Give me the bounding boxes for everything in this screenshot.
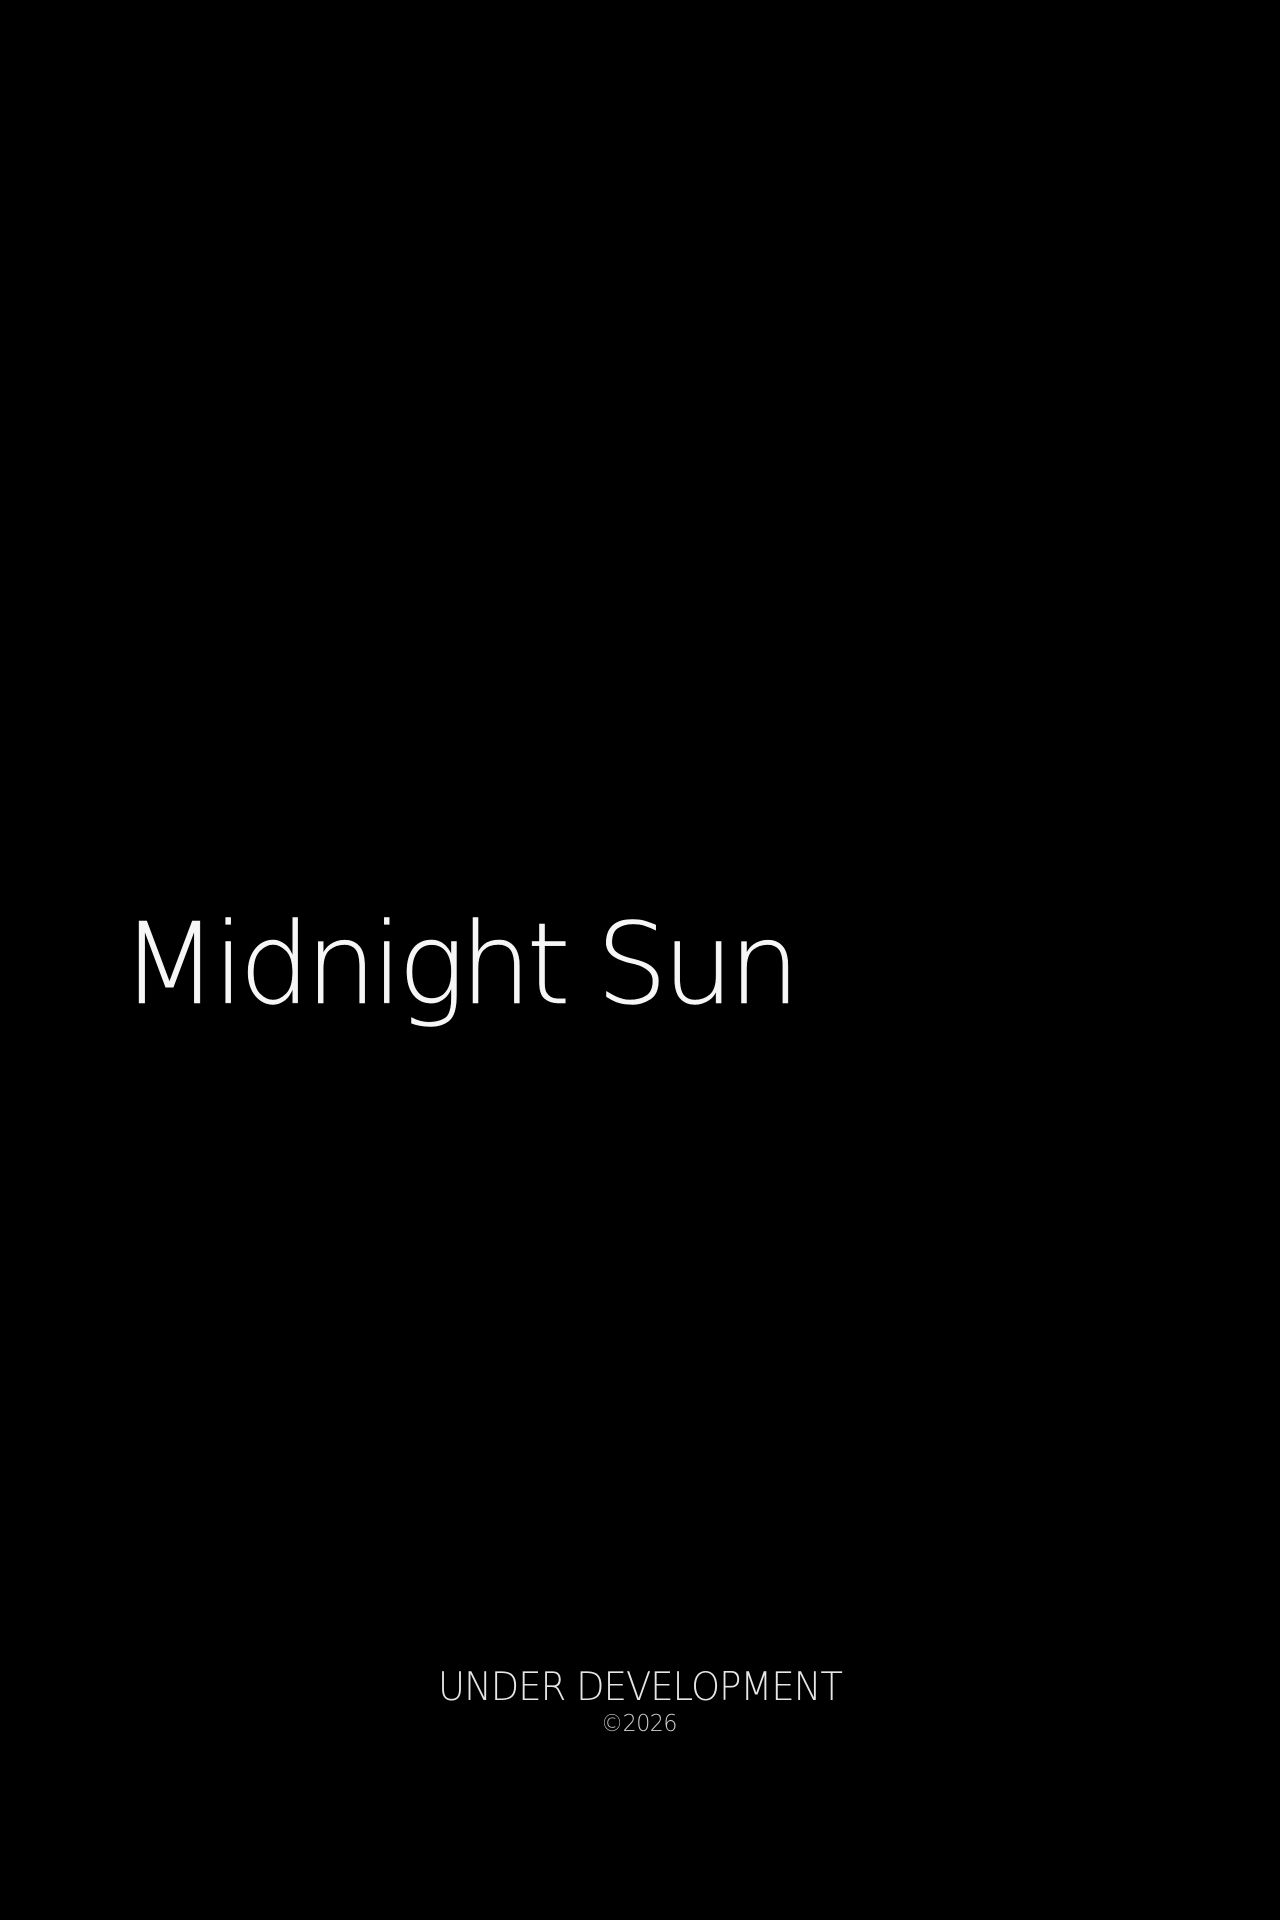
status text: UNDER DEVELOPMENT [438,1665,842,1710]
copyright: ©2026 [601,1711,677,1737]
title: Midnight Sun [121,900,795,1030]
